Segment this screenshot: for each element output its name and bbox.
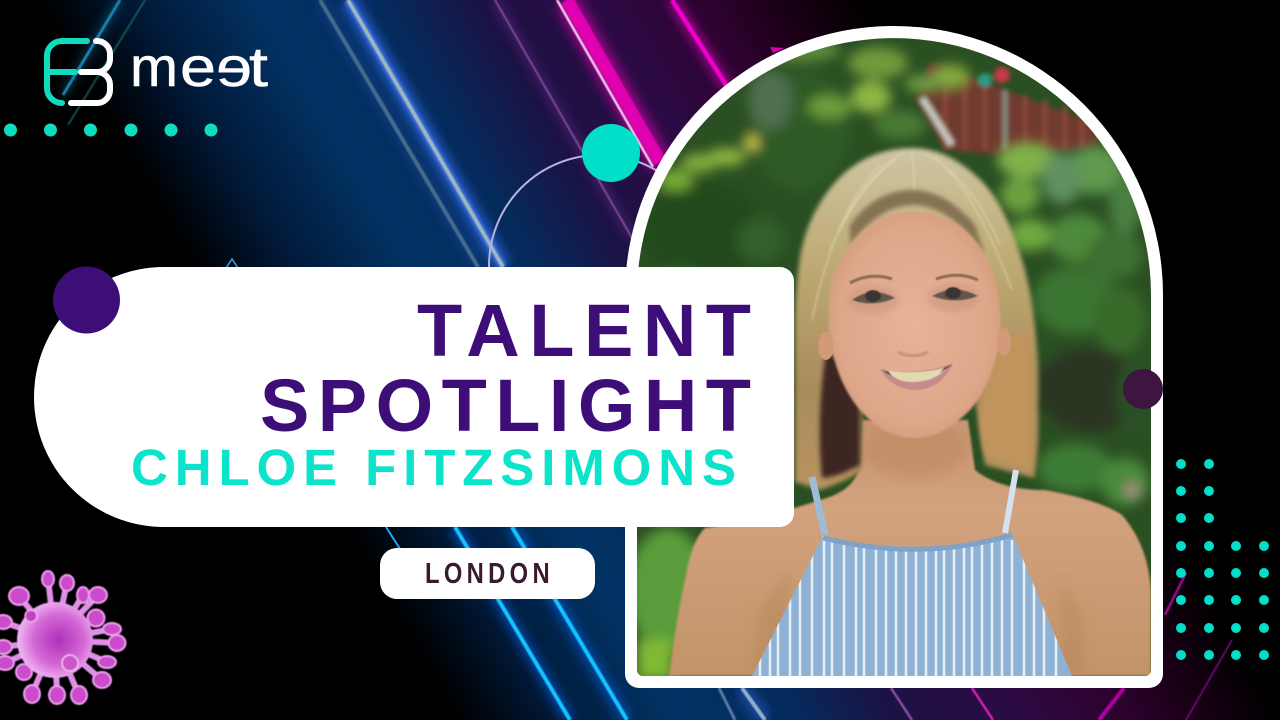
- decorative arc ring: [489, 155, 711, 377]
- photo: upper body skin: [669, 420, 1151, 676]
- photo: face: [829, 212, 1001, 438]
- subtitle: name: CHLOE FITZSIMONS: [131, 439, 736, 496]
- photo: hair shadow left: [820, 350, 860, 478]
- logo: meet: [47, 35, 269, 103]
- logo wordmark: [130, 35, 269, 98]
- photo backdrop: fence and foliage: [628, 38, 1153, 680]
- teal circle: [582, 124, 640, 182]
- icon: pink virus: [0, 571, 126, 704]
- panel: white title pill: [34, 267, 794, 527]
- photo: portrait of Chloe Fitzsimons: [628, 38, 1153, 680]
- plum circle: [1123, 369, 1163, 409]
- location pill: LONDON: [380, 548, 595, 599]
- purple circle: [53, 266, 120, 334]
- location pill: LONDON: LONDON: [425, 557, 550, 590]
- mouth: [880, 364, 953, 390]
- title: SPOTLIGHT: SPOTLIGHT: [260, 364, 751, 447]
- photo: forehead hair shadow: [850, 190, 985, 255]
- photo: hair back: [795, 148, 1039, 490]
- neon lines: teal top-left streaks: [63, 0, 145, 125]
- photo: striped halter top: [752, 470, 1072, 676]
- neon lines: blue streaks upper: [320, 0, 503, 267]
- title: TALENT: TALENT: [417, 289, 751, 372]
- dot grid right: [1176, 459, 1269, 660]
- logo wordmark: t: [249, 35, 269, 98]
- photo: ears: [818, 328, 1011, 360]
- nose: [898, 352, 928, 356]
- photo: hair strands: [812, 150, 1012, 320]
- neon lines: magenta streaks upper: [495, 0, 785, 238]
- neon lines: bottom right streaks: [719, 573, 1232, 720]
- eye socket shade: [849, 287, 898, 313]
- photo: facial features: [847, 275, 979, 390]
- logo wordmark: e: [216, 35, 252, 98]
- logo wordmark: m: [130, 35, 178, 98]
- photo: hair golden right: [980, 330, 1033, 470]
- logo wordmark: e: [180, 35, 216, 98]
- panel: photo arch frame: [625, 26, 1163, 688]
- logo icon: teal half: [47, 41, 87, 103]
- dot row: [4, 124, 218, 136]
- photo: neck and arm shadows: [755, 422, 1085, 676]
- logo icon: white half: [71, 41, 110, 103]
- neon lines: cyan streaks lower: [226, 259, 627, 720]
- straps: [812, 477, 825, 535]
- eyes: [852, 292, 895, 304]
- brows: [850, 276, 892, 283]
